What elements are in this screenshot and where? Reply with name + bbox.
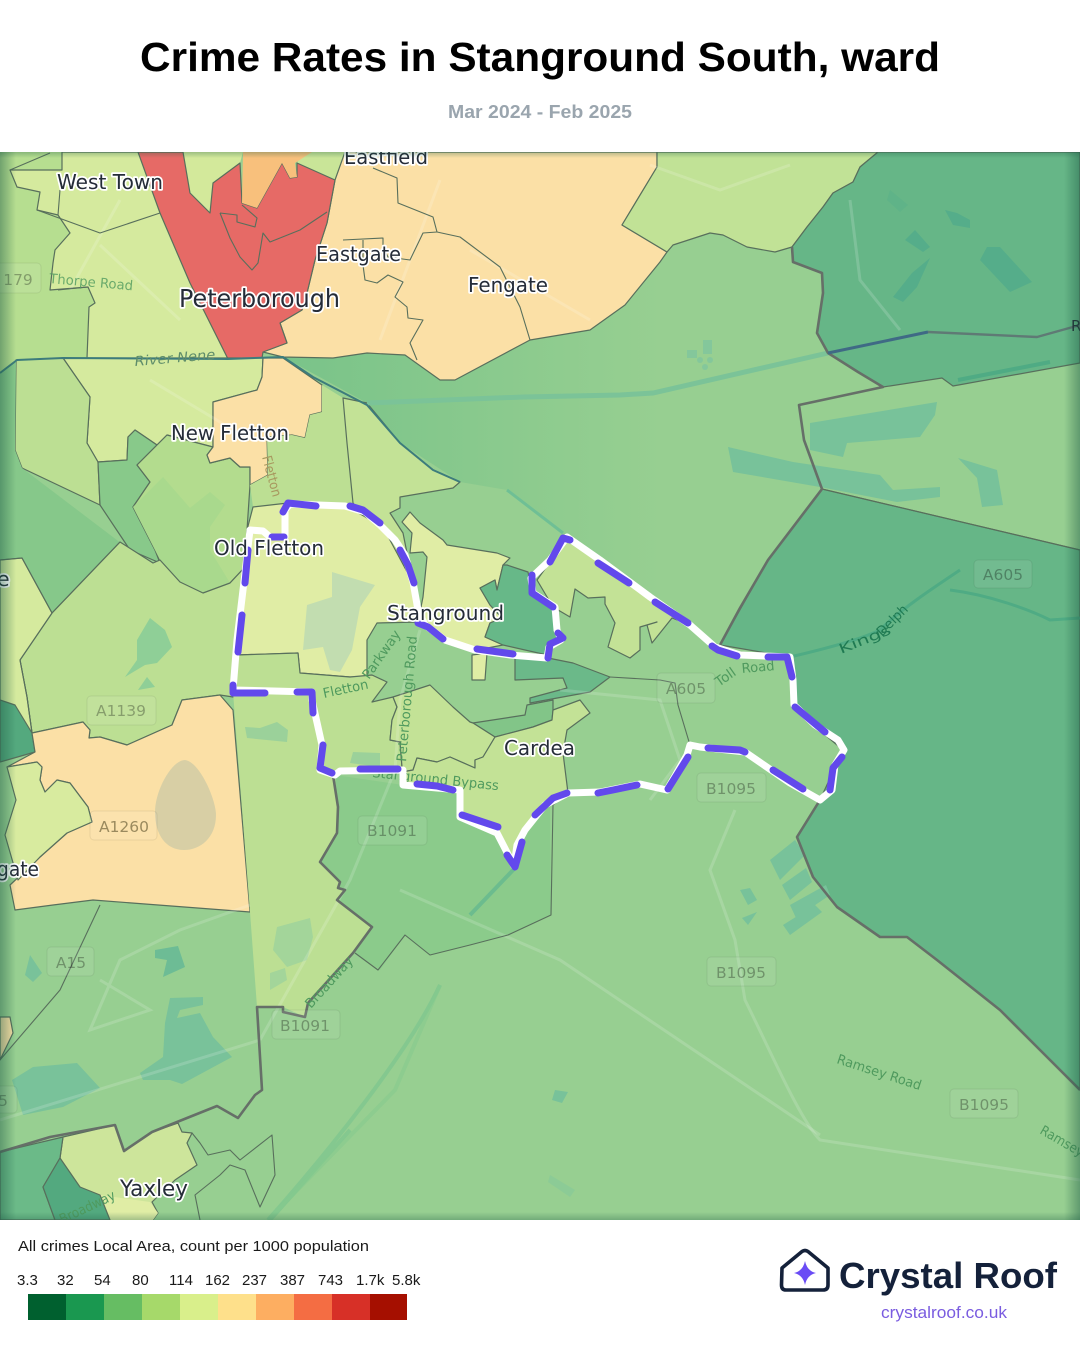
legend scale values: 54 [94,1272,111,1289]
place labels: Yaxley [119,1177,188,1202]
road labels: Broadway [302,953,357,1012]
road labels: Parkway [359,627,404,682]
map edge vignette [0,152,1080,1220]
road labels [48,271,1080,1228]
legend scale values: 5.8k [392,1272,421,1289]
road labels: Fletton [322,677,370,702]
legend scale values: 1.7k [356,1272,385,1289]
website url: crystalroof.co.uk [881,1304,1008,1322]
minor roads [0,165,1080,1180]
road labels: River Nene [134,347,216,370]
legend scale values: 3.3 [17,1272,38,1289]
ward boundary purple dashes [233,503,842,867]
boundary lines [0,153,1080,1220]
place labels: Peterborough [179,284,340,313]
road number labels [0,271,1023,1114]
road labels: Toll [711,665,739,691]
road labels: Fletton [258,454,284,499]
legend scale values: 743 [318,1272,343,1289]
road number labels: A1139 [96,702,146,720]
road number labels: B1095 [716,964,766,982]
road number labels: A605 [666,680,706,698]
place labels: Eastgate [316,242,401,266]
crime rate regions [0,152,1080,1220]
logo: Crystal Roof [782,1250,1058,1322]
place labels: Eastfield [344,145,428,169]
place labels: Fengate [468,273,548,297]
legend scale values: 237 [242,1272,267,1289]
road labels: Thorpe Road [48,271,134,294]
place labels: New Fletton [171,421,289,445]
road number labels: A605 [983,566,1023,584]
road number labels: B1095 [706,780,756,798]
road labels: Stanground Bypass [372,765,500,794]
road number labels: A15 [56,954,86,972]
subtitle: date range: Mar 2024 - Feb 2025 [448,102,632,122]
road number labels: 179 [3,271,33,289]
place labels: Cardea [504,736,575,760]
road labels: Ramsey Road [835,1052,923,1094]
legend scale values: 162 [205,1272,230,1289]
water and land use [12,190,1080,1220]
place labels: Stanground [387,601,504,625]
road labels: Peterborough Road [394,635,421,762]
road labels: Road [741,658,775,677]
road labels: Delph [874,602,912,640]
road labels: Kings [837,622,893,658]
legend scale values: 387 [280,1272,305,1289]
road number labels: A1260 [99,818,149,836]
legend scale values: 32 [57,1272,74,1289]
legend [17,1238,421,1320]
map base [0,152,1080,1220]
road number labels: B1091 [280,1017,330,1035]
logo wordmark: Crystal Roof [839,1255,1058,1296]
ward boundary: Stanground South [233,503,844,867]
road number badges [0,263,1032,1118]
legend scale values: 114 [169,1272,193,1289]
place labels: West Town [57,170,163,194]
place labels [0,145,1080,1202]
icon: house with star [782,1250,828,1290]
road labels: Broadway [57,1188,118,1228]
title: Crime Rates in Stanground South, ward [140,34,940,80]
legend title: All crimes Local Area, count per 1000 population [18,1238,369,1255]
legend scale values: 80 [132,1272,149,1289]
road number labels: B1091 [367,822,417,840]
road number labels: B1095 [959,1096,1009,1114]
legend scale values [17,1272,421,1289]
place labels: Old Fletton [214,536,324,560]
ward boundary white outline [233,504,844,866]
legend colour swatches [28,1294,407,1320]
